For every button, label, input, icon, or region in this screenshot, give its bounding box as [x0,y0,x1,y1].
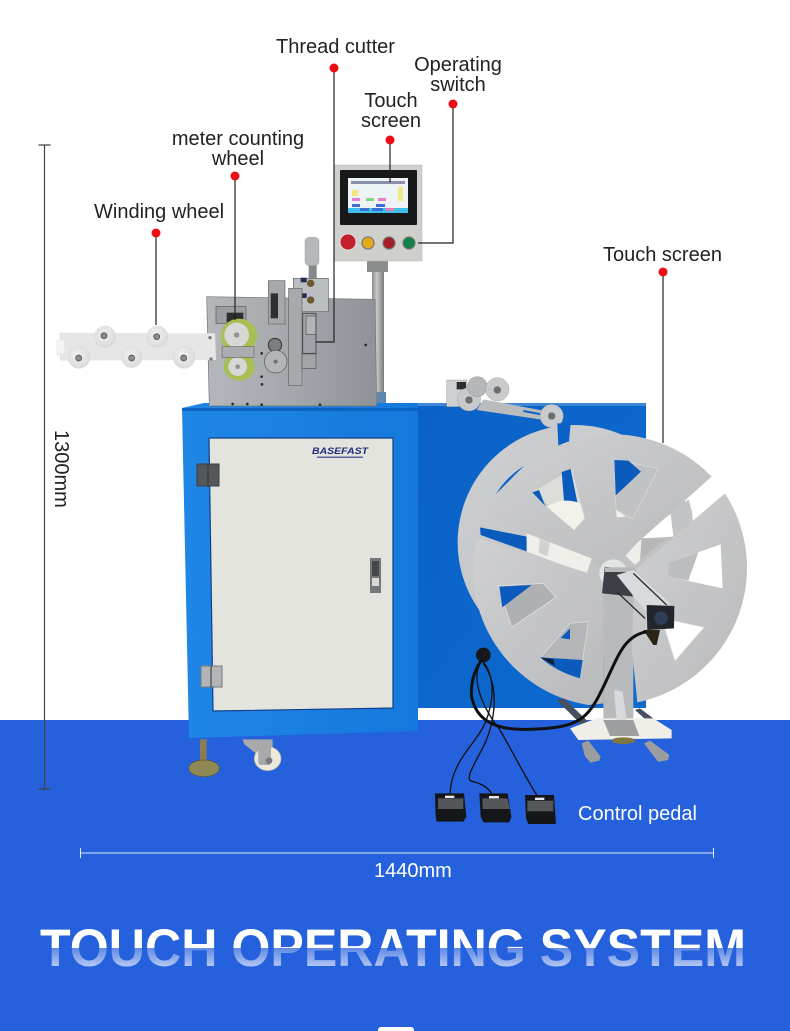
label: meter counting wheel: meter counting [172,128,304,150]
guide roller arm [447,377,563,428]
front disc sector: lower left [473,538,603,705]
machine: right blue cabinet [418,403,646,708]
gap between front sectors [480,477,725,574]
label: touch screen (panel): screen [361,110,421,132]
panel buttons [340,234,415,250]
front disc sector: top [487,434,712,567]
rear disc [458,423,692,660]
machine: left blue cabinet with door [182,403,418,738]
pedal 3 [525,795,556,824]
label: control pedal: Control pedal [578,803,697,825]
front disc sector: right [632,493,747,702]
label: operating switch: switch [430,74,486,96]
pedal 2 [479,793,511,822]
label: touch screen (panel) [361,90,421,182]
label: touch screen (reel) [603,244,722,443]
label: meter counting wheel [172,128,304,320]
meter counting wheels [216,307,257,381]
dimension: height 1300mm [38,145,72,789]
dimension: width 1440mm [80,848,714,882]
touch screen display [348,178,408,213]
touch screen bezel [340,170,417,225]
logo text: BASEFAST [312,446,369,457]
air cylinder [599,559,674,645]
control panel box [334,165,422,261]
label: winding wheel [94,201,224,325]
label: meter counting wheel: wheel [211,148,264,170]
blue floor band [0,720,790,1031]
thread cutter assembly [264,237,328,386]
label: touch screen (reel): Touch screen [603,244,722,266]
label: operating switch: Operating [414,54,502,76]
dimension: height 1300mm: 1300mm [50,430,72,508]
door hinges [197,464,222,687]
door latch [370,558,381,593]
label: winding wheel: Winding wheel [94,201,224,223]
label: touch screen (panel): Touch [364,90,418,112]
machine: winding wheel arm [57,326,216,368]
machine: pole and control panel [334,165,422,406]
label: thread cutter [276,36,395,342]
pedal 1 [435,793,466,822]
title: TOUCH OPERATING SYSTEM [40,919,746,978]
dimension: width 1440mm: 1440mm [374,860,452,882]
cabinet door [209,438,393,711]
bottom white tab [378,1027,414,1031]
machine: foot pedals and wires [435,660,556,824]
label: operating switch [414,54,502,243]
machine: levelling foot and caster [189,739,281,777]
machine: meter counting mechanism plate [207,237,377,406]
machine: reel stand, discs and air cylinder [447,377,747,763]
stand post [557,587,660,728]
cable and grommet [471,632,647,729]
label: thread cutter: Thread cutter [276,36,395,58]
stand base [570,690,672,763]
